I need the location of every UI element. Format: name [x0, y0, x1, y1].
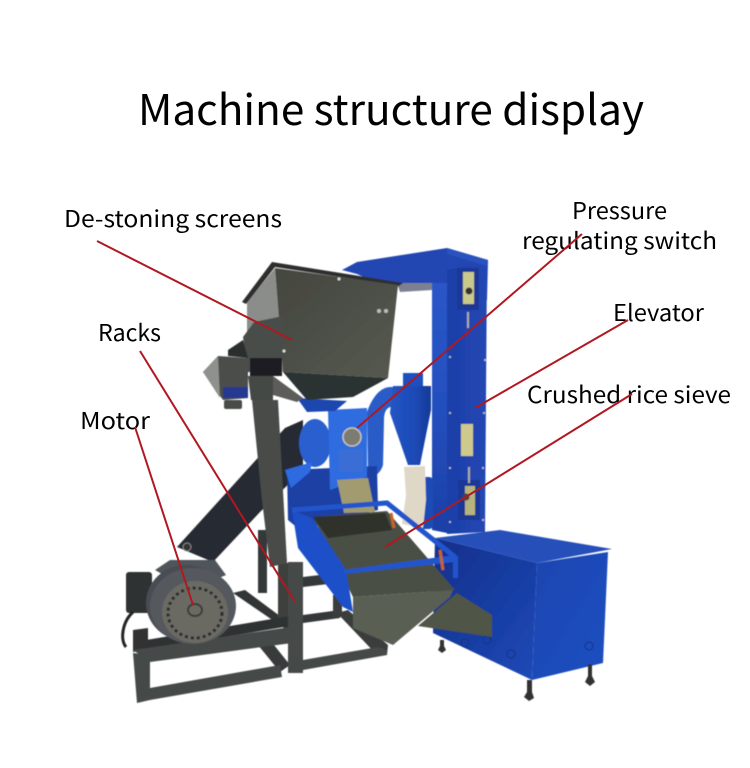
blue blower base and sieve support — [285, 408, 378, 530]
bin / collection box — [433, 530, 612, 701]
callout: elevator: Elevator — [613, 294, 704, 328]
callout: elevator — [475, 294, 704, 408]
callout: pressure regulating switch: Pressure — [572, 192, 667, 226]
callout: crushed rice sieve: Crushed rice sieve — [527, 376, 731, 410]
callout: motor: Motor — [80, 402, 150, 436]
callout: crushed rice sieve — [385, 376, 731, 547]
machine illustration — [123, 248, 612, 703]
cyclone and dust bag — [367, 373, 433, 529]
callout: racks — [98, 314, 295, 602]
callout: de-stoning screens: De-stoning screens — [64, 200, 282, 234]
callout: racks: Racks — [98, 314, 161, 348]
callout: de-stoning screens — [64, 200, 292, 340]
callout: pressure regulating switch — [357, 192, 717, 428]
title: Machine structure display — [138, 77, 644, 138]
racks / steel frame — [133, 530, 388, 703]
callout: motor — [80, 402, 193, 605]
elevator — [342, 248, 488, 534]
crushed rice sieve — [292, 503, 492, 645]
motor — [123, 543, 236, 647]
feed chute and support column — [203, 316, 303, 567]
hopper / de-stoning screens — [242, 262, 403, 412]
drive belt guard — [177, 420, 303, 562]
callout: pressure regulating switch: regulating switch — [522, 222, 717, 256]
